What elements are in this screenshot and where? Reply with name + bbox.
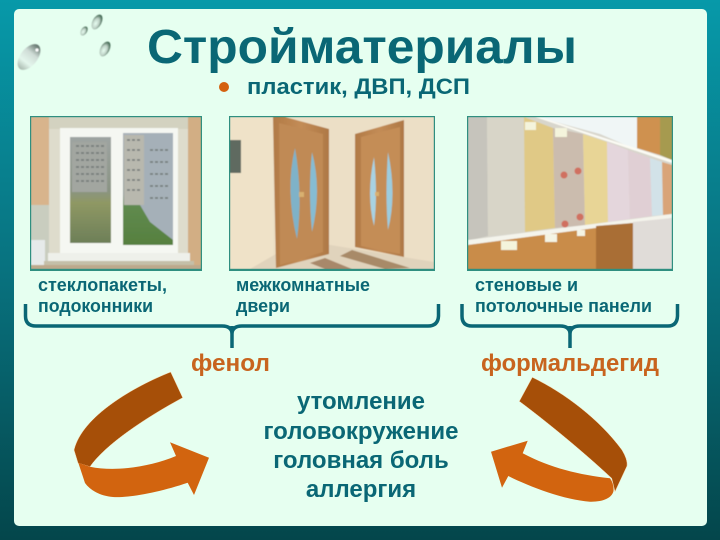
arrow: right curved bbox=[491, 377, 627, 502]
symptoms list: головокружение bbox=[263, 418, 459, 445]
label: panels: стеновые и bbox=[475, 275, 578, 295]
symptoms list: головная боль bbox=[273, 447, 449, 474]
photo: wall and ceiling panels bbox=[467, 116, 673, 271]
arrow back ribbon bbox=[519, 377, 627, 492]
bullet point bbox=[219, 74, 470, 99]
arrow front head bbox=[491, 441, 614, 502]
bullet marker bbox=[219, 82, 229, 92]
bullet text: пластик, ДВП, ДСП bbox=[247, 74, 470, 99]
brace: left group bbox=[26, 304, 438, 348]
arrow front head bbox=[78, 442, 209, 497]
brace: right group bbox=[462, 304, 678, 348]
title: Стройматериалы bbox=[147, 21, 577, 74]
label: windows: подоконники bbox=[38, 296, 153, 316]
label: doors: двери bbox=[236, 296, 290, 316]
photo: interior doors bbox=[229, 116, 435, 271]
symptoms list: аллергия bbox=[306, 476, 416, 503]
label: phenol: фенол bbox=[191, 350, 270, 377]
label: doors: межкомнатные bbox=[236, 275, 370, 295]
arrow back ribbon bbox=[74, 372, 183, 467]
arrow: left curved bbox=[74, 372, 209, 497]
photo: plastic window bbox=[30, 116, 202, 271]
label: windows: стеклопакеты, bbox=[38, 275, 167, 295]
label: formaldehyde: формальдегид bbox=[481, 350, 659, 377]
symptoms list: утомление bbox=[297, 388, 425, 415]
label: panels: потолочные панели bbox=[475, 296, 652, 316]
water drops decoration bbox=[13, 13, 113, 74]
